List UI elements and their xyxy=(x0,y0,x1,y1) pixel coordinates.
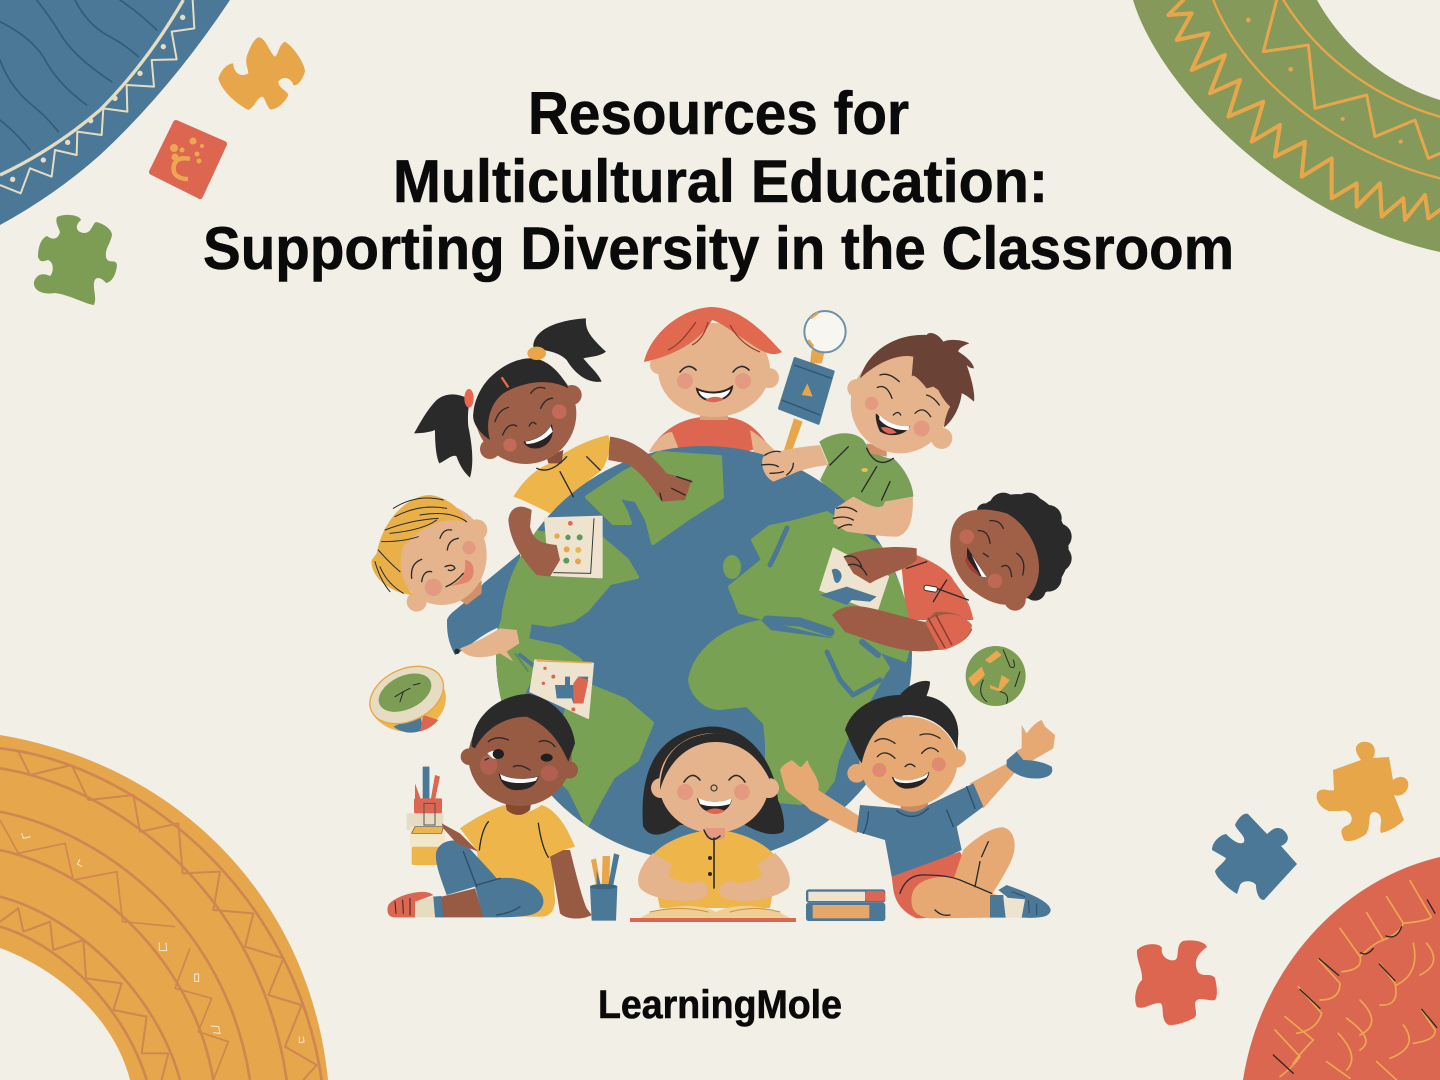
pencil cup xyxy=(591,853,619,885)
Africa and Arabia land xyxy=(690,622,888,803)
corner arc: green top right xyxy=(1133,0,1440,252)
inland seas xyxy=(770,528,787,565)
illustration: children around the globe xyxy=(361,307,1072,922)
child: boy with brown hair and green shirt xyxy=(762,333,974,537)
South America land xyxy=(562,684,654,827)
corner arc: red bottom right xyxy=(1243,857,1440,1080)
North America land xyxy=(587,453,722,543)
arms xyxy=(608,437,692,502)
puzzle piece: red right xyxy=(1135,940,1217,1025)
child: blonde boy xyxy=(372,495,487,612)
hand on cup xyxy=(442,823,478,852)
right arm xyxy=(550,850,592,919)
small globe ball xyxy=(966,646,1026,706)
globe xyxy=(490,446,915,862)
puzzle piece: green left xyxy=(34,215,117,305)
child: boy with blue shirt waving xyxy=(780,681,1055,918)
child: boy with yellow shirt xyxy=(387,694,619,921)
corner arc: orange bottom left xyxy=(0,735,328,1080)
raised arms xyxy=(780,760,860,833)
small bowl xyxy=(361,655,453,735)
pencil holder stack xyxy=(407,767,445,865)
title: Multicultural Education: xyxy=(393,148,1048,215)
puzzle piece: orange right xyxy=(1317,742,1408,841)
title: Supporting Diversity in the Classroom xyxy=(203,215,1234,282)
card xyxy=(545,517,602,577)
child: red haired child xyxy=(644,307,782,417)
crossed leg xyxy=(440,888,484,917)
puzzle card xyxy=(530,660,593,718)
puzzle piece: blue right xyxy=(1212,814,1297,900)
icon: red square tile xyxy=(152,123,224,196)
corner arc: blue top left xyxy=(0,0,230,225)
logo: LearningMole: LearningMole xyxy=(598,983,842,1027)
child: boy with curly hair and red shirt xyxy=(820,493,1072,612)
lower arm of curly haired boy xyxy=(832,606,972,651)
title xyxy=(203,80,1234,282)
map card xyxy=(820,548,888,612)
title: Resources for xyxy=(528,80,909,147)
child: girl with pigtails xyxy=(414,318,692,577)
stacked books xyxy=(806,889,885,921)
arm of blonde boy xyxy=(454,628,528,672)
child bodies behind globe xyxy=(447,412,973,655)
magnifying glass xyxy=(779,311,846,452)
puzzle piece: orange top left xyxy=(218,37,305,110)
Eurasia land xyxy=(730,513,915,660)
crossed leg xyxy=(953,827,1015,895)
child: girl with long black hair xyxy=(630,727,796,922)
